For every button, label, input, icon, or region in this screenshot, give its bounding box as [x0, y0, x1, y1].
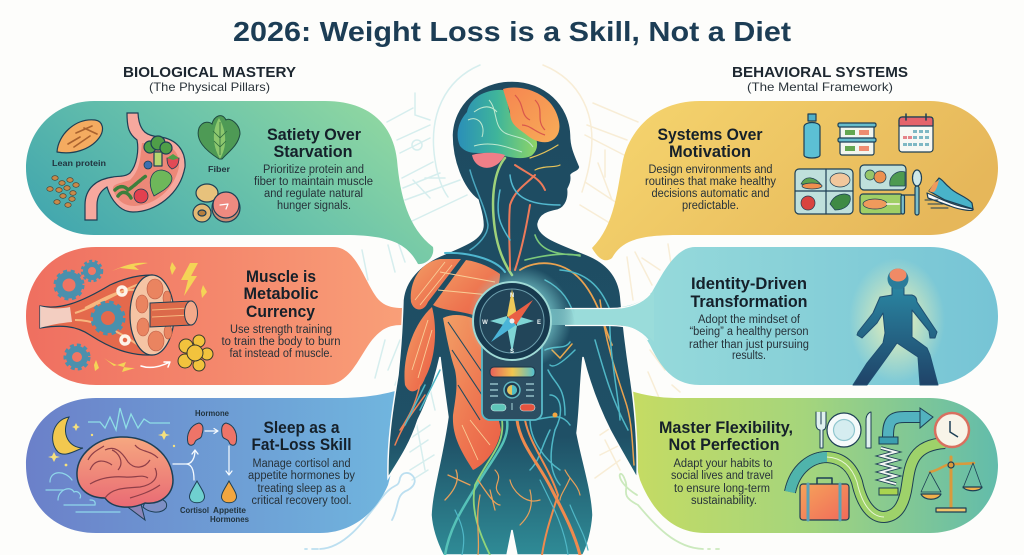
- cross section: [130, 275, 174, 355]
- arm and chest muscles: [404, 259, 501, 470]
- heading and body text: Metabolic: [244, 285, 318, 303]
- heading: behavioral systems: BEHAVIORAL SYSTEMS: [732, 64, 908, 81]
- heading and body text: fiber to maintain muscle: [254, 176, 373, 188]
- panel: satiety over starvation: [26, 101, 433, 264]
- icon: muscle bundle: [40, 275, 198, 355]
- heading and body text: decisions automatic and: [652, 188, 770, 200]
- nerves in head and neck: [445, 145, 580, 275]
- nerves lower body: [445, 420, 588, 555]
- icon: chicken breast: [57, 120, 102, 153]
- icon: beans and steak: [193, 184, 240, 222]
- heading and body text: to train the body to burn: [222, 336, 340, 348]
- brain: green hemisphere: [458, 90, 537, 158]
- heading and body text: Currency: [246, 303, 316, 321]
- panel: identity-driven transformation: [545, 247, 998, 385]
- panel background: [545, 247, 998, 385]
- compass face: W: [482, 320, 488, 326]
- labels: cortisol and appetite hormones: Hormones: [210, 515, 250, 524]
- heading and body text: [689, 275, 809, 362]
- heading and body text: treating sleep as a: [258, 483, 346, 495]
- icon: stomach: [85, 113, 185, 220]
- label: lean protein: Lean protein: [52, 159, 106, 168]
- icon: gears: [55, 261, 129, 369]
- brain: cerebellum: [472, 153, 505, 168]
- heading and body text: Sleep as a: [264, 419, 340, 437]
- teal tail connecting compass to identity panel: [548, 290, 654, 342]
- heading: biological mastery: (The Physical Pillars): [149, 80, 270, 94]
- fibre: [150, 301, 192, 327]
- panel background: [26, 386, 412, 533]
- strawberry: [167, 158, 179, 169]
- deltoid: [411, 259, 461, 310]
- heading: biological mastery: BIOLOGICAL MASTERY: [123, 64, 296, 81]
- heading and body text: and regulate natural: [264, 188, 363, 200]
- blueberry: [144, 161, 152, 169]
- icon: lentils: [47, 176, 79, 207]
- icon: meal prep containers: [838, 123, 876, 155]
- panel: master flexibility: [612, 384, 998, 533]
- compass face: N: [510, 293, 514, 299]
- greens: [115, 176, 146, 198]
- labels: cortisol and appetite hormones: Appetite: [213, 506, 247, 515]
- panel background: [26, 247, 402, 385]
- colour status bar: [490, 367, 535, 377]
- heading and body text: appetite hormones by: [248, 470, 355, 482]
- compass glow: [468, 266, 572, 370]
- heading: behavioral systems: [732, 64, 908, 94]
- dial and controls: [490, 382, 535, 411]
- central human body: [388, 81, 637, 555]
- figure glow: [849, 258, 945, 382]
- panel: muscle is metabolic currency: [26, 247, 402, 385]
- heading and body text: social lives and travel: [671, 470, 773, 482]
- heading and body text: “being” a healthy person: [690, 326, 808, 338]
- icon: kidneys: [187, 423, 237, 445]
- panel background: [26, 101, 433, 264]
- compass device: [468, 266, 572, 420]
- labels: cortisol and appetite hormones: [180, 506, 250, 524]
- heading and body text: Transformation: [690, 293, 808, 311]
- icon: fork, plate, knife: [816, 412, 871, 448]
- arrow: [141, 362, 170, 367]
- heading and body text: [248, 419, 355, 507]
- stars: [48, 423, 175, 466]
- heading and body text: to ensure long-term: [674, 483, 770, 495]
- icon: standing figure with brain: [853, 268, 938, 385]
- heading and body text: Not Perfection: [668, 436, 780, 454]
- icon: water bottle: [804, 114, 820, 158]
- heading and body text: Use strength training: [230, 324, 332, 336]
- heading and body text: [222, 268, 340, 360]
- panel: systems over motivation: [592, 101, 998, 260]
- icon: crescent moon: [53, 417, 83, 454]
- labels: cortisol and appetite hormones: Cortisol: [180, 506, 209, 515]
- heading and body text: [659, 419, 793, 507]
- heading and body text: [645, 126, 776, 212]
- label: hormone: Hormone: [195, 409, 230, 418]
- pectoral: [433, 260, 500, 318]
- heading and body text: [254, 126, 373, 212]
- body silhouette: [388, 81, 637, 555]
- heading: biological mastery: [123, 64, 296, 94]
- heading and body text: Prioritize protein and: [263, 164, 364, 176]
- heading and body text: fat instead of muscle.: [230, 348, 332, 360]
- nerves in right torso and arm: [395, 263, 634, 470]
- broccoli: [144, 136, 172, 166]
- fibre lines: [412, 262, 495, 460]
- heading and body text: Satiety Over: [267, 126, 362, 144]
- icon: lightning bolts: [94, 262, 207, 372]
- icon: fat cells: [178, 335, 213, 371]
- heading and body text: Starvation: [274, 143, 352, 161]
- abdominal side: [443, 315, 501, 470]
- icon: meal tray: [795, 169, 853, 214]
- heading and body text: Motivation: [669, 143, 751, 161]
- heading: behavioral systems: (The Mental Framework): [747, 80, 893, 94]
- heading and body text: Adopt the mindset of: [698, 314, 801, 326]
- label: fiber: Fiber: [208, 165, 230, 174]
- icon: balance scale: [921, 457, 982, 512]
- heading and body text: Systems Over: [658, 126, 763, 144]
- icon: hormone drops: [189, 481, 237, 503]
- compass face: S: [510, 349, 514, 355]
- icon: brain: [77, 437, 173, 520]
- heading and body text: Muscle is: [246, 268, 316, 286]
- title: 2026: Weight Loss is a Skill, Not a Diet: [233, 16, 791, 47]
- device body: [482, 340, 542, 420]
- heading and body text: hunger signals.: [277, 200, 351, 212]
- panel background: [612, 384, 998, 533]
- icon: lunchbox compartments: [860, 165, 906, 214]
- icon: spinach leaf: [198, 116, 240, 159]
- icon: suitcase: [800, 478, 849, 520]
- heading and body text: Identity-Driven: [691, 275, 807, 293]
- heading and body text: predictable.: [682, 200, 739, 212]
- heading and body text: Adapt your habits to: [674, 458, 772, 470]
- clouds: [46, 473, 120, 512]
- heading and body text: routines that make healthy: [645, 176, 776, 188]
- upper arm: [404, 307, 435, 391]
- panel background: [592, 101, 998, 260]
- heading and body text: Fat-Loss Skill: [252, 436, 352, 454]
- brain: orange hemisphere: [503, 88, 559, 142]
- leaf: [150, 170, 172, 196]
- compass face: E: [537, 320, 541, 326]
- compass face: [473, 282, 551, 360]
- heading and body text: Manage cortisol and: [252, 458, 350, 470]
- icon: spring with arrow: [879, 408, 933, 495]
- tomato: [134, 189, 148, 203]
- heading and body text: sustainability.: [691, 495, 757, 507]
- icon: clock: [935, 413, 969, 447]
- icon: green winding path: [790, 443, 945, 517]
- icon: running shoe: [925, 178, 973, 210]
- icon: calendar: [899, 114, 933, 152]
- circuit traces behind the head: [305, 65, 719, 549]
- heading and body text: Design environments and: [648, 164, 772, 176]
- heading and body text: Master Flexibility,: [659, 419, 793, 437]
- heading and body text: rather than just pursuing: [689, 339, 809, 351]
- panel: sleep as a fat-loss skill: [26, 386, 412, 533]
- heading and body text: results.: [732, 350, 766, 362]
- heading and body text: critical recovery tool.: [252, 495, 352, 507]
- icon: sleep wave: [88, 408, 170, 430]
- hormone pathway: [173, 428, 232, 480]
- icon: spoon: [901, 170, 922, 215]
